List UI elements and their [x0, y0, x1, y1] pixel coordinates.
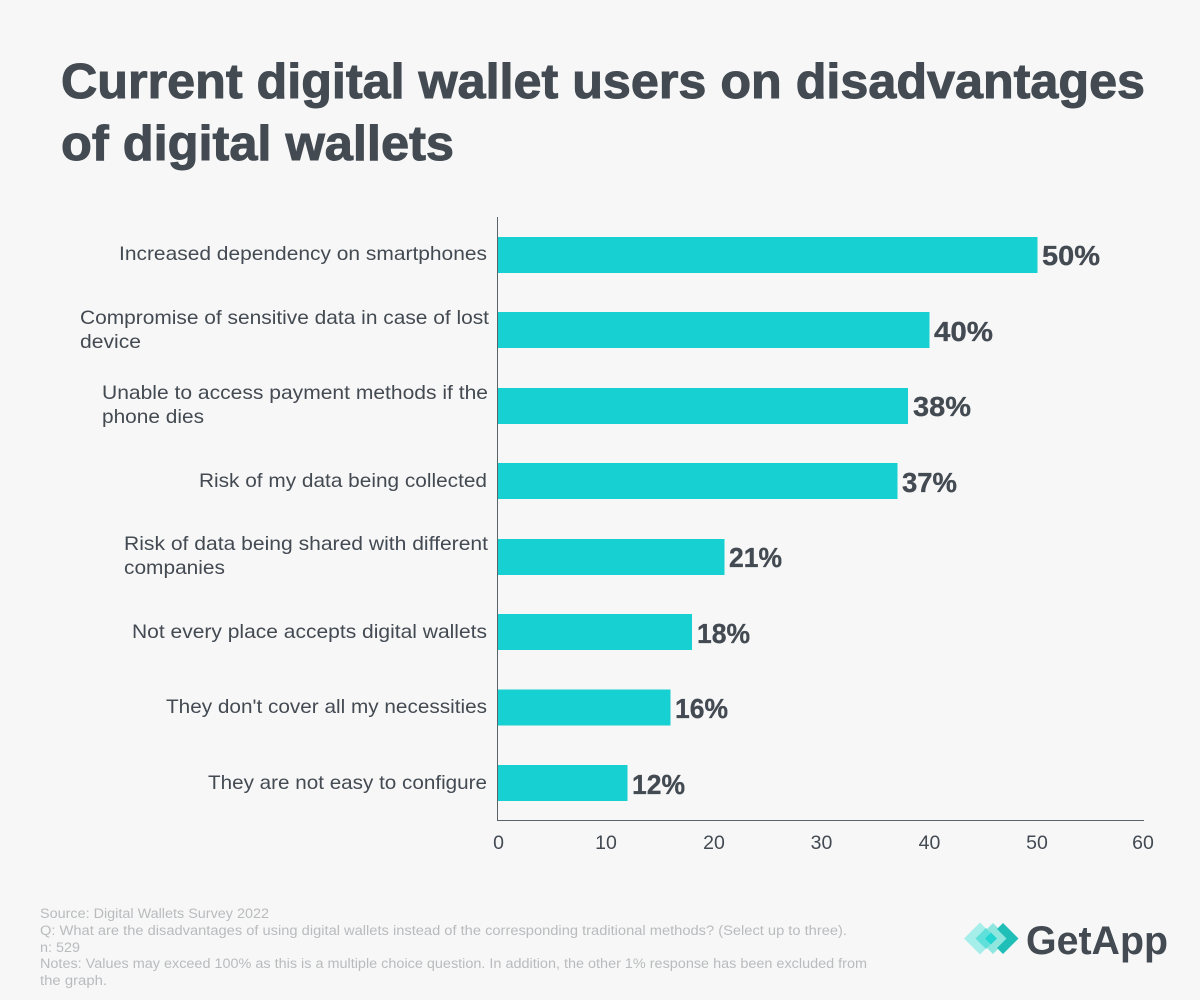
title: Current digital wallet users on disadvantages — [61, 55, 1145, 109]
bars — [498, 237, 1038, 801]
title — [61, 55, 1145, 171]
value labels: 38% — [913, 391, 971, 422]
category labels: phone dies — [102, 406, 204, 428]
source and notes — [40, 906, 867, 988]
source and notes: n: 529 — [40, 940, 80, 955]
x axis tick labels: 30 — [811, 832, 832, 854]
source and notes: Q: What are the disadvantages of using digital wallets instead of the corresponding traditional methods? (Select up to three). — [40, 923, 847, 938]
category labels: They are not easy to configure — [208, 772, 487, 794]
logo wordmark: GetApp — [1026, 919, 1168, 963]
source and notes: the graph. — [40, 973, 107, 988]
category labels: device — [80, 331, 141, 353]
value labels: 18% — [697, 618, 750, 649]
value labels: 21% — [729, 542, 782, 573]
x axis tick labels: 50 — [1026, 832, 1048, 854]
category labels — [80, 243, 490, 794]
value labels — [632, 240, 1100, 800]
source and notes: Source: Digital Wallets Survey 2022 — [40, 906, 269, 921]
bar chart — [80, 217, 1154, 854]
category labels: Unable to access payment methods if the — [102, 382, 488, 404]
category labels: companies — [124, 557, 225, 579]
title: of digital wallets — [61, 117, 454, 171]
value labels: 50% — [1042, 240, 1100, 271]
source and notes: Notes: Values may exceed 100% as this is a multiple choice question. In addition, the other 1% response has been excluded from — [40, 956, 867, 971]
value labels: 40% — [934, 316, 993, 347]
x axis tick labels: 60 — [1132, 832, 1154, 854]
x axis tick labels: 10 — [595, 832, 617, 854]
value labels: 16% — [675, 693, 728, 724]
icon: diamonds and chevrons — [964, 922, 1018, 954]
category labels: Compromise of sensitive data in case of lost — [80, 307, 490, 329]
logo: GetApp — [964, 919, 1168, 963]
value labels: 37% — [902, 467, 957, 498]
x axis tick labels — [493, 832, 1154, 854]
axes — [498, 217, 1144, 820]
x axis tick labels: 40 — [919, 832, 940, 854]
category labels: Increased dependency on smartphones — [119, 243, 487, 265]
category labels: Not every place accepts digital wallets — [132, 621, 487, 643]
category labels: Risk of data being shared with different — [124, 533, 489, 555]
value labels: 12% — [632, 769, 685, 800]
x axis tick labels: 20 — [703, 832, 725, 854]
x axis tick labels: 0 — [493, 832, 504, 854]
category labels: Risk of my data being collected — [199, 470, 487, 492]
category labels: They don't cover all my necessities — [166, 696, 487, 718]
